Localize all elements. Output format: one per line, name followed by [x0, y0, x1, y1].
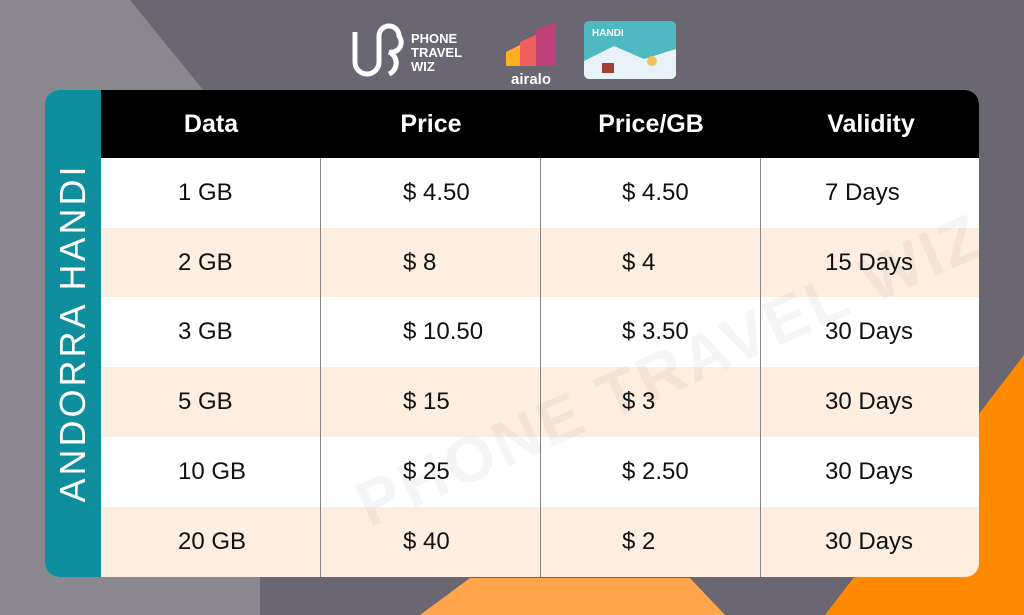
rows: $ 4.50 — [403, 179, 470, 206]
rows: 1 GB — [178, 179, 233, 206]
rows: 30 Days — [825, 318, 913, 345]
rows: $ 4 — [622, 249, 655, 276]
rows: 15 Days — [825, 249, 913, 276]
logo: phone travel wiz: WIZ — [411, 59, 435, 74]
rows: $ 4.50 — [622, 179, 689, 206]
header row: Price — [400, 110, 462, 138]
logo: handi card — [584, 21, 676, 79]
logo: airalo — [506, 22, 556, 88]
rows: $ 2.50 — [622, 458, 689, 485]
rows: 5 GB — [178, 388, 233, 415]
rows: 30 Days — [825, 458, 913, 485]
rows: 2 GB — [178, 249, 233, 276]
logo: phone travel wiz: TRAVEL — [411, 45, 462, 60]
rows — [101, 158, 979, 577]
rows: $ 40 — [403, 528, 450, 555]
rows: $ 2 — [622, 528, 655, 555]
rows: $ 25 — [403, 458, 450, 485]
table — [45, 90, 979, 577]
logo: phone travel wiz: PHONE — [411, 31, 457, 46]
header row: Validity — [827, 110, 915, 138]
rows: 7 Days — [825, 179, 900, 206]
rows: 3 GB — [178, 318, 233, 345]
rows: 30 Days — [825, 528, 913, 555]
rows: $ 8 — [403, 249, 436, 276]
logo: phone travel wiz — [352, 24, 462, 76]
rows: 20 GB — [178, 528, 246, 555]
rows: $ 3 — [622, 388, 655, 415]
rows: $ 3.50 — [622, 318, 689, 345]
rows: 10 GB — [178, 458, 246, 485]
rows: 30 Days — [825, 388, 913, 415]
sidebar: ANDORRA HANDI — [45, 90, 101, 577]
header row — [101, 90, 979, 158]
watermark: PHONE TRAVEL WIZ — [346, 199, 979, 541]
logo: airalo: airalo — [511, 71, 551, 88]
header row: Price/GB — [598, 110, 704, 138]
logo: handi card: HANDI — [592, 28, 624, 39]
rows: $ 15 — [403, 388, 450, 415]
header row: Data — [184, 110, 238, 138]
rows: $ 10.50 — [403, 318, 483, 345]
sidebar: ANDORRA HANDI: ANDORRA HANDI — [52, 163, 93, 503]
